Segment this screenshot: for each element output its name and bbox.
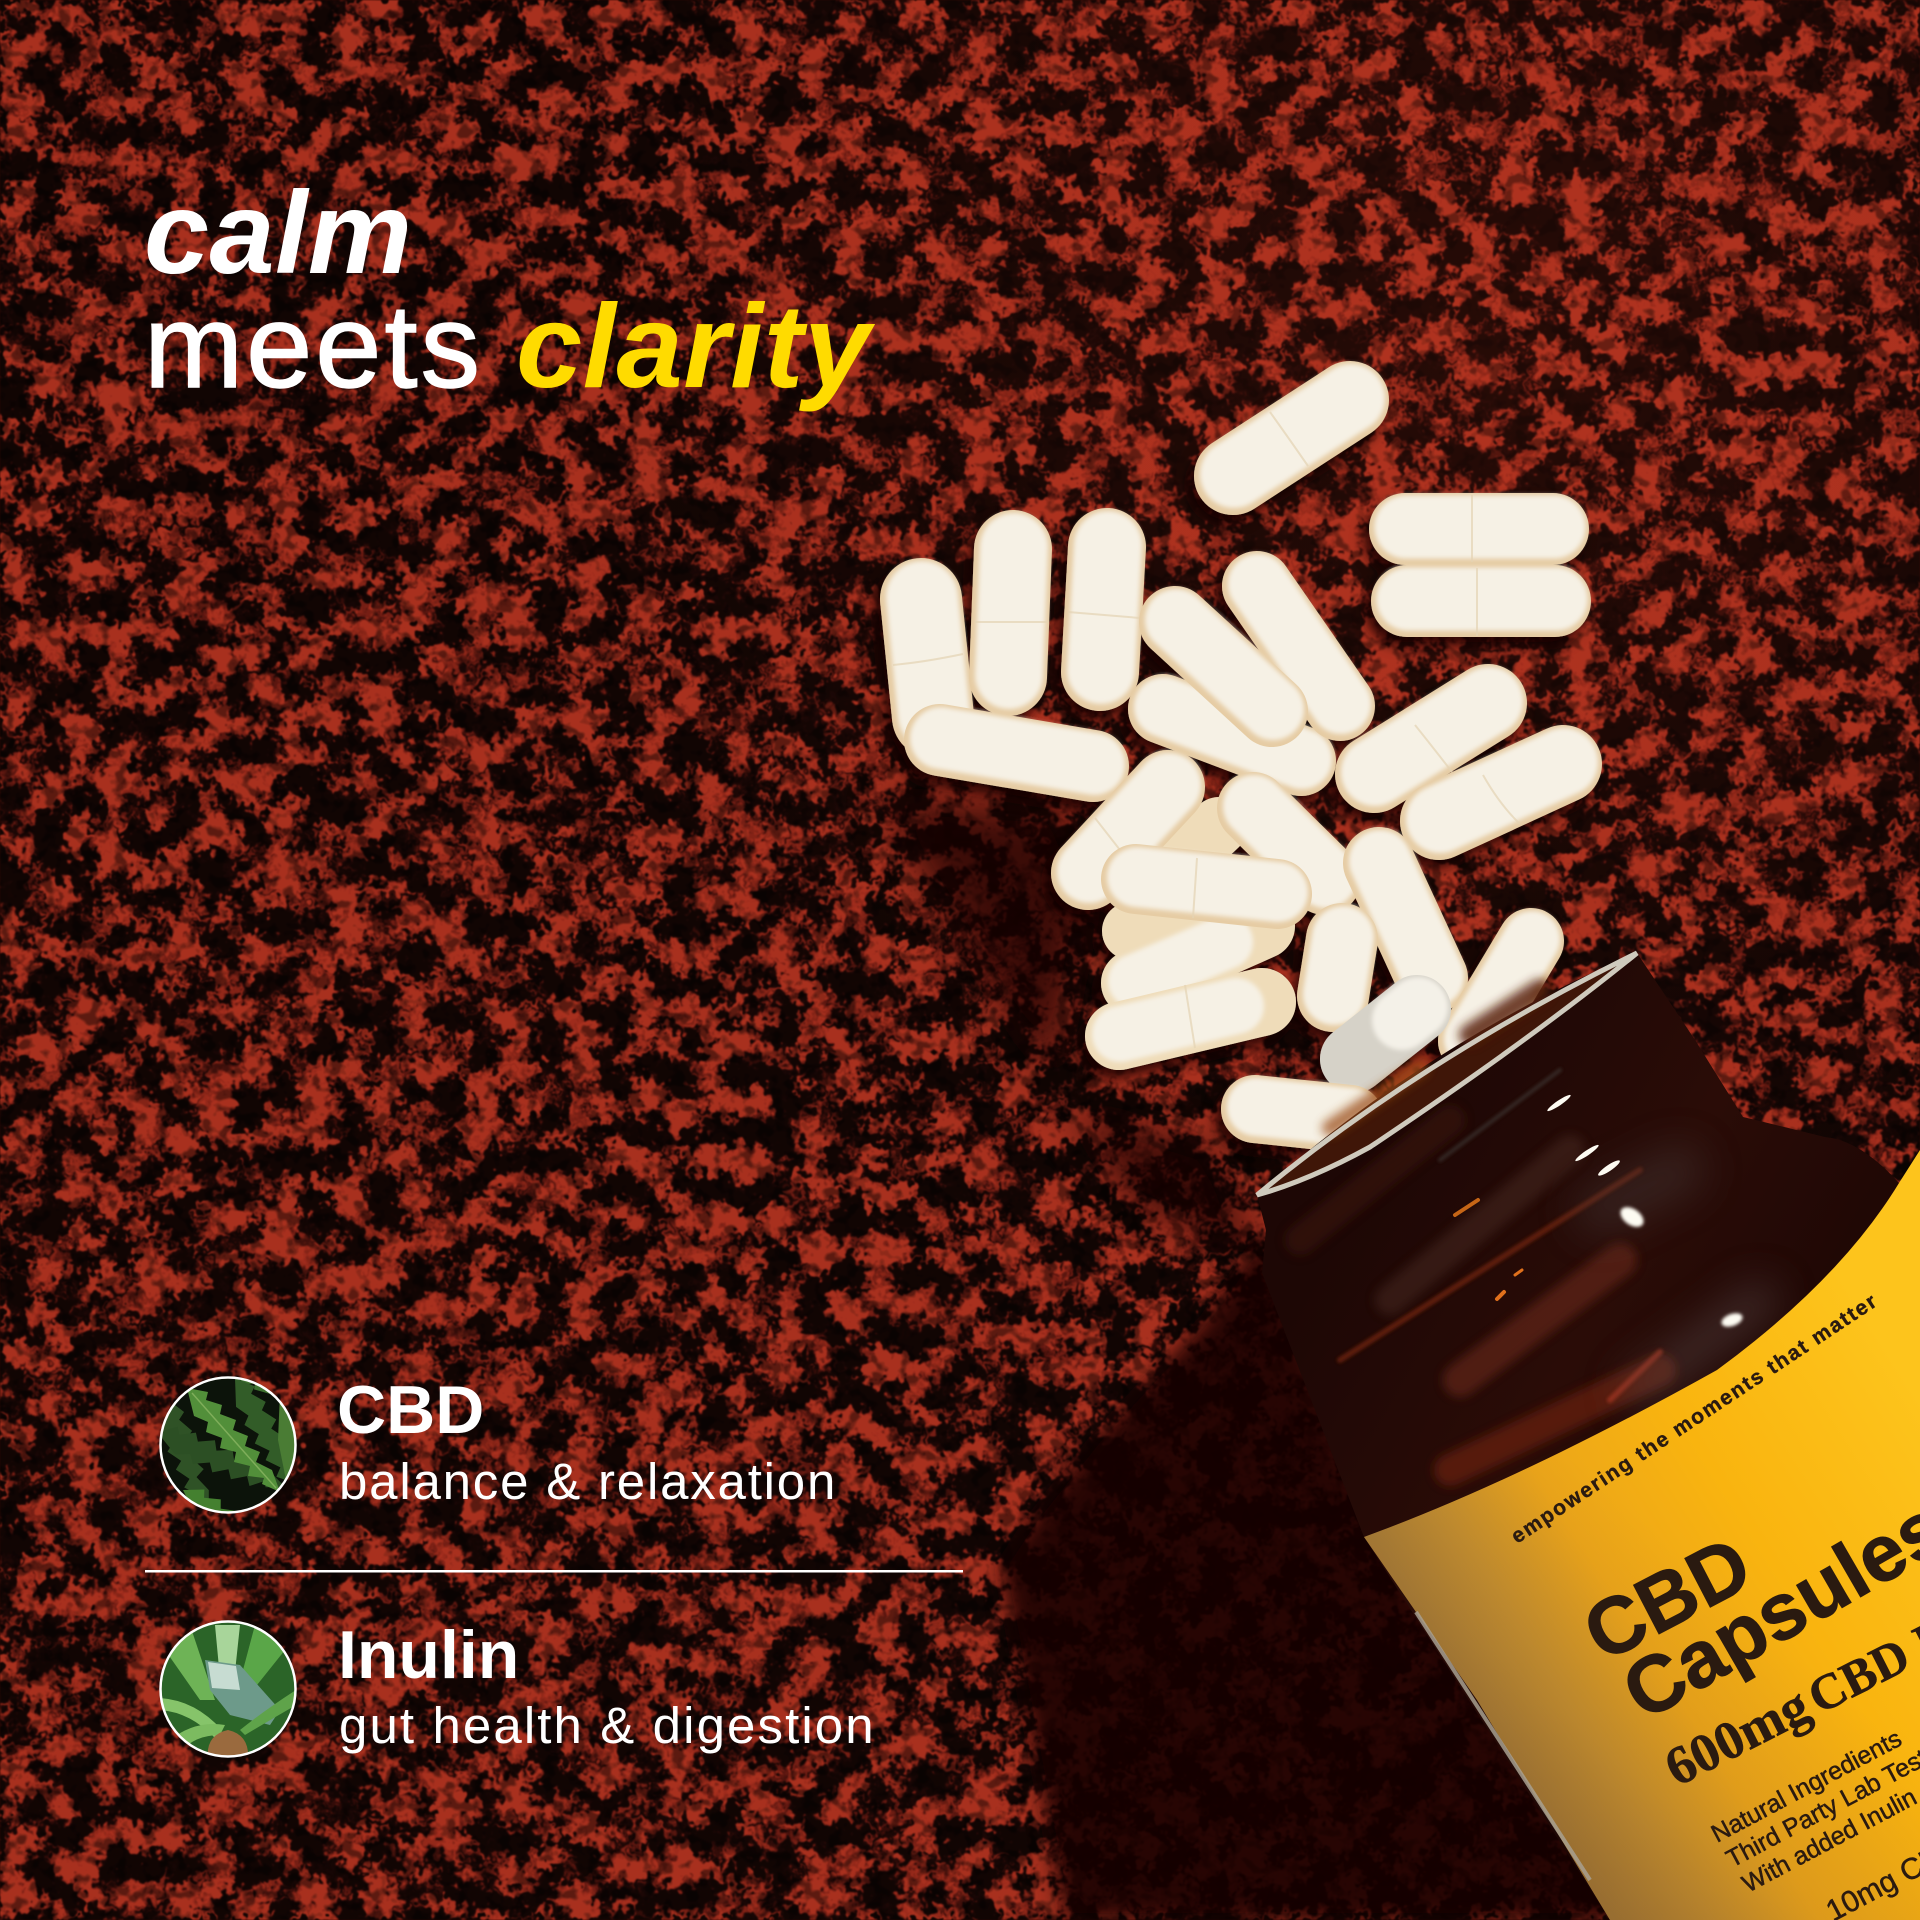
title: clarity xyxy=(516,280,876,413)
icon ring: cannabis xyxy=(160,1378,296,1512)
title: calm xyxy=(144,167,412,298)
yellow jar label xyxy=(1364,1150,1920,1920)
label tagline: empowering the moments that matter xyxy=(1507,1290,1881,1548)
icon: cannabis leaf xyxy=(162,1378,294,1512)
label claims: With added Inulin xyxy=(1738,1783,1920,1898)
label product name: CBD xyxy=(1570,1519,1765,1678)
ingredient: Inulin text xyxy=(338,1617,876,1754)
icon ring: chicory xyxy=(160,1622,296,1756)
divider xyxy=(145,1570,963,1572)
title xyxy=(144,167,876,413)
ingredient: Inulin text: gut health & digestion xyxy=(339,1697,876,1754)
title: meets xyxy=(144,280,483,413)
amber glass jar xyxy=(1257,953,1920,1920)
ingredient: CBD text: CBD xyxy=(337,1372,484,1448)
glare spots xyxy=(1546,1093,1744,1329)
capsules spilling out of the jar xyxy=(893,398,1564,1119)
jar mouth interior xyxy=(1257,953,1637,1195)
ingredient: Inulin text: Inulin xyxy=(338,1617,519,1693)
icon: chicory plant xyxy=(160,1621,296,1760)
reflections xyxy=(1300,990,1760,1470)
jar rim xyxy=(1257,953,1637,1195)
ingredient: CBD text: balance & relaxation xyxy=(339,1453,837,1510)
ingredient: CBD text xyxy=(337,1372,837,1510)
jar body xyxy=(1257,953,1920,1920)
label claims xyxy=(1707,1724,1920,1920)
label claims: Natural Ingredients xyxy=(1707,1724,1906,1848)
